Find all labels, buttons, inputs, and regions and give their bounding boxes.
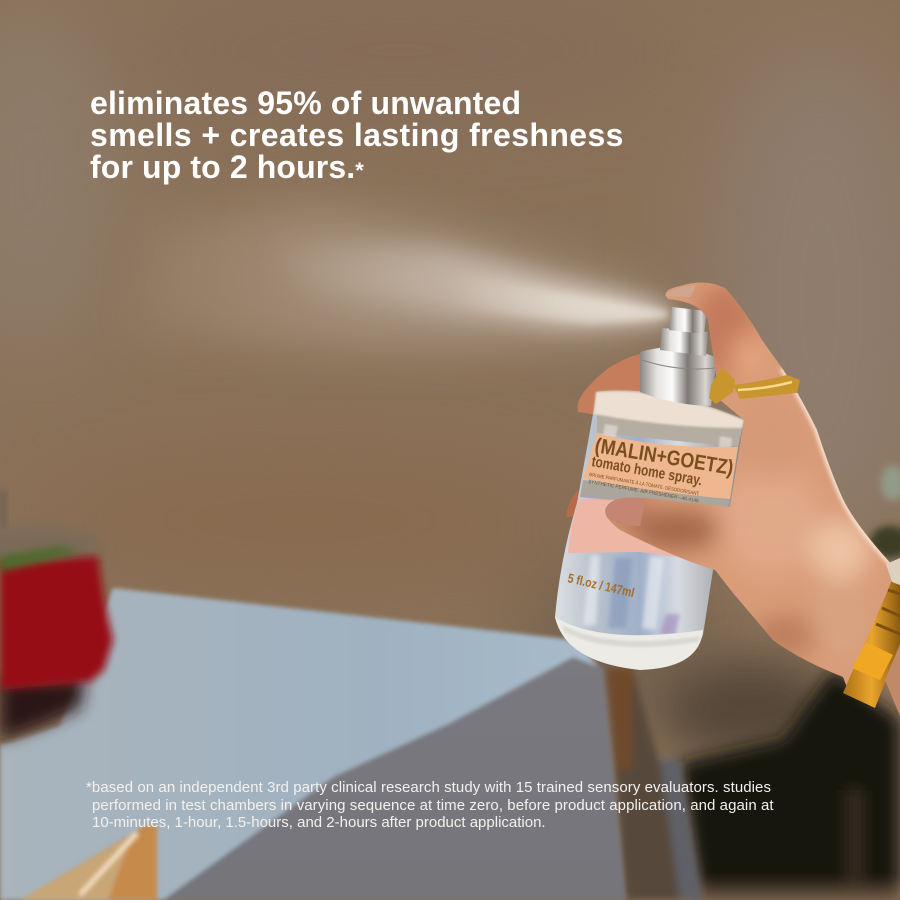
headline: eliminates 95% of unwanted [90, 85, 521, 121]
bottle [555, 391, 744, 670]
bottle label [583, 433, 738, 504]
footnote: *based on an independent 3rd party clinical research study with 15 trained sensory evaluators. studies [86, 779, 771, 796]
gold watch [843, 558, 900, 716]
bottle label: SYNTHETIC PERFUME. AIR FRESHENER—40.4145 [588, 479, 699, 504]
hand [605, 282, 892, 686]
headline: smells + creates lasting freshness [90, 117, 624, 153]
index fingernail [665, 285, 696, 297]
headline: for up to 2 hours.* [90, 149, 364, 185]
spray mist [130, 205, 668, 345]
bottle cap [640, 307, 717, 406]
plants, right edge [870, 465, 900, 558]
footnote [86, 779, 774, 831]
table [0, 588, 626, 900]
fingers behind bottle [566, 354, 650, 517]
bottle label: tomato home spray. [590, 453, 704, 489]
footnote: 10-minutes, 1-hour, 1.5-hours, and 2-hours after product application. [92, 814, 546, 831]
chair back [20, 825, 157, 900]
thumbnail [606, 498, 646, 526]
bottle label: BRUME PARFUMANTE À LA TOMATE. DÉSODORISANT. [589, 471, 700, 497]
bottle volume text: 5 fl.oz / 147ml [566, 570, 636, 600]
gold ring [709, 367, 800, 404]
bottle label: (MALIN+GOETZ) [593, 434, 735, 480]
table leg and edge [607, 668, 702, 900]
headline [90, 85, 624, 185]
dark shape, lower right [680, 670, 900, 900]
footnote: performed in test chambers in varying sequence at time zero, before product application, and again at [92, 796, 774, 814]
red pot with plant [0, 490, 113, 740]
